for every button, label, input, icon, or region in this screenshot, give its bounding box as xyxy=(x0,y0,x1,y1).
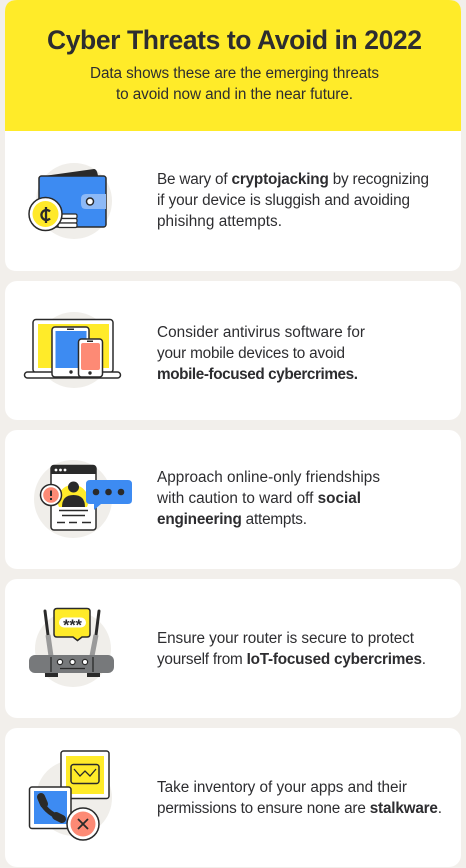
text: mobile xyxy=(157,324,365,383)
subtitle: to avoid now and in the near future. xyxy=(116,86,353,103)
panel: stalkware xyxy=(5,728,461,867)
text: IoT xyxy=(157,630,426,668)
text: stalkware xyxy=(157,779,442,817)
password stars: *** xyxy=(63,618,83,634)
panel: header xyxy=(5,0,461,131)
panel: IoT xyxy=(5,579,461,718)
text: social engineering: Approach online-only friendships xyxy=(157,469,380,486)
text: IoT: yourself from IoT-focused cybercrimes. xyxy=(157,651,426,668)
text: cryptojacking: phisihng attempts. xyxy=(157,213,282,230)
text: mobile: mobile-focused cybercrimes. xyxy=(157,366,358,383)
text: mobile: your mobile devices to avoid xyxy=(157,345,345,362)
icon: devices xyxy=(24,312,120,388)
text: mobile: Consider antivirus software for xyxy=(157,324,365,341)
text: IoT: Ensure your router is secure to protect xyxy=(157,630,415,647)
text: cryptojacking: Be wary of cryptojacking by recognizing xyxy=(157,171,429,188)
text: cryptojacking xyxy=(157,171,429,230)
icon: apps xyxy=(30,751,112,840)
panel: cryptojacking xyxy=(5,131,461,271)
text: cryptojacking: if your device is sluggish and avoiding xyxy=(157,192,410,209)
subtitle: Data shows these are the emerging threats xyxy=(90,65,379,82)
text: social engineering xyxy=(156,469,380,528)
panel: mobile xyxy=(5,281,461,420)
icon: profile alert xyxy=(34,460,132,538)
title: Cyber Threats to Avoid in 2022 xyxy=(47,25,422,55)
text: stalkware: Take inventory of your apps and their xyxy=(157,779,407,796)
icon: router xyxy=(29,608,114,687)
text: stalkware: permissions to ensure none are stalkware. xyxy=(157,800,442,817)
icon: wallet xyxy=(29,163,112,239)
text: social engineering: engineering attempts. xyxy=(157,511,307,528)
panel: social engineering xyxy=(5,430,461,569)
subtitle xyxy=(90,65,379,103)
text: social engineering: with caution to ward off social xyxy=(156,490,361,507)
